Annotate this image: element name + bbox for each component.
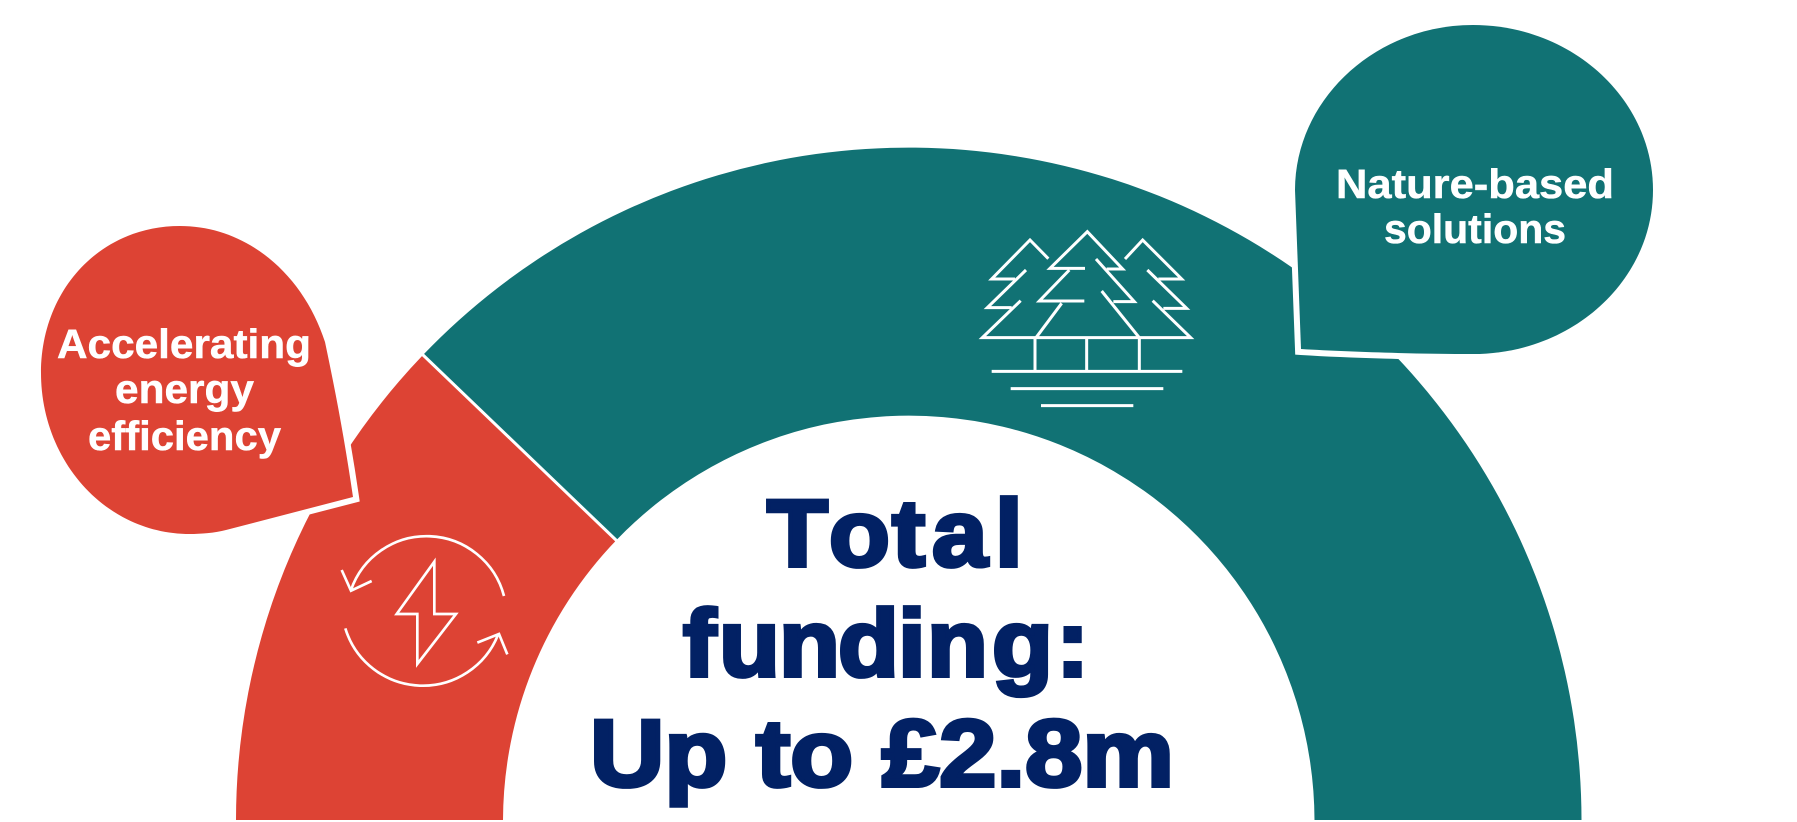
callout: accelerating energy efficiency xyxy=(41,226,353,534)
icon: energy bolt with cycle arrows xyxy=(342,536,507,686)
callout text: red: energy xyxy=(115,366,254,412)
icon: trees xyxy=(982,232,1191,406)
callout: nature-based solutions xyxy=(1295,25,1653,354)
heading: total funding: funding: xyxy=(683,591,1089,697)
heading: total funding xyxy=(590,481,1174,807)
callout text: red: Accelerating xyxy=(57,321,311,367)
callout text: teal: Nature-based xyxy=(1336,161,1614,207)
panel: accelerating energy efficiency arc segment xyxy=(236,355,616,820)
callout text: teal: solutions xyxy=(1384,206,1566,252)
callout text: red xyxy=(57,321,311,459)
callout text: teal xyxy=(1336,161,1614,252)
callout bubble: teal xyxy=(1295,25,1653,354)
callout bubble: red xyxy=(41,226,353,534)
heading: total funding: Up to £2.8m xyxy=(590,701,1174,807)
callout text: red: efficiency xyxy=(88,413,281,459)
panel: nature-based solutions arc segment xyxy=(423,148,1582,820)
heading: total funding: Total xyxy=(767,481,1023,587)
